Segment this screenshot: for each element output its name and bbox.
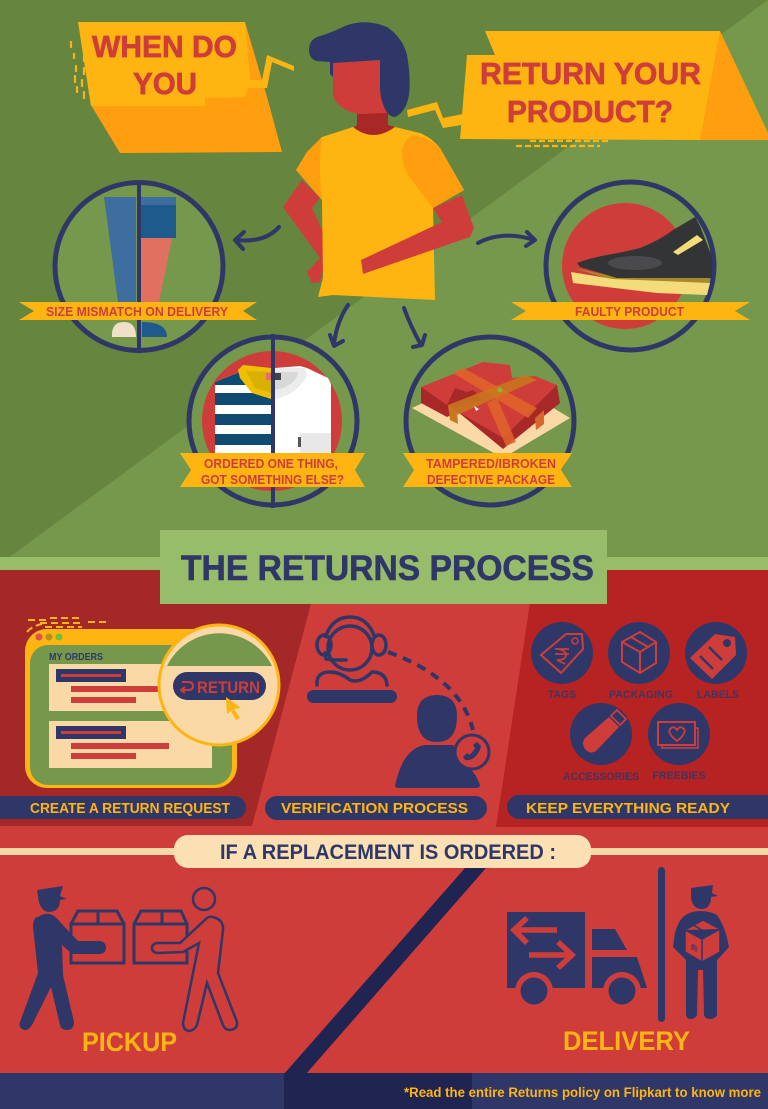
speech bubble: when do you: YOU (133, 66, 197, 101)
label: labels: LABELS (697, 689, 739, 701)
speech bubble: return your product (407, 31, 768, 146)
panel: create a return request: CREATE A RETURN REQUEST (30, 800, 230, 817)
panel: create a return request (0, 618, 279, 819)
panel: size mismatch (19, 180, 257, 353)
speech bubble: return your product: RETURN YOUR (480, 56, 701, 91)
label: tags: TAGS (548, 689, 576, 701)
panel: verification process (265, 617, 489, 820)
panel: ordered one thing, got something else (180, 334, 365, 508)
icon: freebies (648, 703, 710, 765)
speech bubble: return your product: PRODUCT? (507, 94, 673, 129)
label: delivery: DELIVERY (563, 1026, 690, 1056)
heading: the returns process: THE RETURNS PROCESS (181, 549, 594, 588)
speech bubble: when do you (71, 22, 294, 153)
box held by courier (71, 911, 124, 963)
heading: if a replacement is ordered (0, 835, 768, 868)
arrow: to size mismatch (235, 227, 279, 249)
pill: keep everything ready (507, 795, 768, 819)
arrow: to wrong item (330, 305, 348, 346)
panel: pickup (20, 886, 237, 1057)
heading: the returns process (160, 530, 607, 604)
panel: size mismatch: SIZE MISMATCH ON DELIVERY (46, 304, 228, 319)
customer figure (152, 888, 237, 1031)
pole (658, 867, 665, 1022)
footer band: *Read the entire Returns policy on Flipkart to know more (404, 1085, 761, 1100)
icon: tags (531, 622, 593, 684)
box held by customer (134, 911, 187, 963)
label: freebies: FREEBIES (652, 770, 706, 782)
panel: delivery (507, 867, 729, 1056)
label: accessories: ACCESSORIES (563, 771, 639, 783)
icon: accessories (570, 703, 632, 765)
icon: labels (685, 622, 747, 684)
panel: verification process: VERIFICATION PROCESS (281, 800, 468, 817)
delivery person (673, 885, 729, 1019)
icon: packaging (608, 622, 670, 684)
footer band (0, 1073, 768, 1109)
panel: create a return request: RETURN (197, 678, 260, 697)
label: packaging: PACKAGING (609, 689, 673, 701)
panel: create a return request: MY ORDERS (49, 652, 103, 663)
panel: ordered one thing, got something else: GOT SOMETHING ELSE? (201, 472, 344, 487)
speech bubble: when do you: WHEN DO (92, 29, 237, 64)
top background (0, 0, 768, 570)
icon: truck (507, 912, 647, 1010)
arrow: to damaged package (404, 308, 425, 347)
courier figure (20, 886, 106, 1030)
panel: ordered one thing, got something else: ORDERED ONE THING, (204, 456, 338, 471)
arrow: to faulty product (478, 232, 535, 246)
panel: damaged package: TAMPERED/IBROKEN (426, 456, 556, 471)
character (283, 22, 474, 300)
panel: faulty product (511, 182, 750, 350)
label: pickup: PICKUP (82, 1027, 177, 1057)
heading: if a replacement is ordered: IF A REPLACEMENT IS ORDERED : (220, 841, 556, 864)
panel: damaged package: DEFECTIVE PACKAGE (427, 472, 555, 487)
pill: keep everything ready: KEEP EVERYTHING READY (526, 800, 730, 817)
panel: damaged package (403, 337, 574, 505)
panel: keep everything ready (507, 622, 768, 819)
panel: faulty product: FAULTY PRODUCT (575, 304, 684, 319)
diagonal divider (284, 868, 486, 1074)
process background (0, 557, 768, 1074)
